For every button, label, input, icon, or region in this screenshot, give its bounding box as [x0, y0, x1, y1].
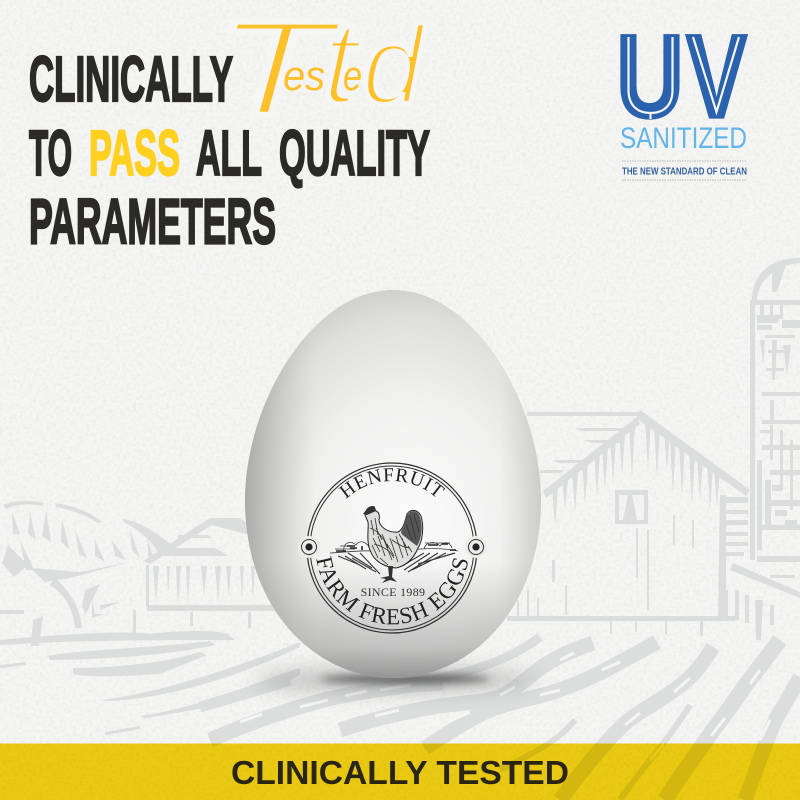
farm sketch background	[0, 258, 800, 800]
egg shadow	[255, 669, 535, 691]
bottom banner	[0, 744, 800, 800]
UV sanitized logo	[616, 11, 747, 180]
hen	[363, 506, 423, 583]
egg	[245, 290, 541, 678]
heading line 3: PARAMETERS	[29, 186, 276, 258]
big barn	[507, 410, 750, 636]
script word: Tested: d	[362, 4, 427, 127]
UV letters: V	[686, 11, 747, 143]
left ornament	[298, 536, 320, 558]
heading line 2: all: ALL	[196, 117, 262, 189]
heading line 1: CLINICALLY	[29, 43, 233, 115]
left tree	[0, 501, 172, 646]
brand name: HENFRUIT	[338, 468, 446, 499]
banner label: CLINICALLY TESTED	[231, 754, 569, 791]
farm fresh eggs: FARM FRESH EGGS	[316, 556, 468, 624]
farm landscape	[330, 542, 458, 574]
right ornament	[465, 536, 487, 558]
field furrows left	[0, 631, 300, 735]
since 1989: SINCE 1989	[361, 585, 425, 599]
henfruit stamp	[298, 462, 484, 634]
hen legs	[380, 566, 397, 583]
heading	[29, 43, 430, 258]
furrow breakups	[240, 653, 770, 770]
script word: Tested	[214, 0, 427, 144]
stamp rings	[307, 463, 477, 633]
script word: Tested: t	[322, 0, 363, 129]
UV letters	[616, 11, 747, 143]
small barn	[133, 518, 280, 636]
heading line 2: quality: QUALITY	[279, 117, 430, 189]
heading: TO	[29, 117, 72, 189]
field furrows right	[200, 637, 800, 800]
silo	[722, 258, 800, 640]
script word: Tested: e	[343, 52, 362, 99]
heading line 2: pass: PASS	[89, 117, 180, 189]
UV letters: U	[616, 11, 684, 143]
script word: Tested: es	[283, 52, 325, 99]
tagline: THE NEW STANDARD OF CLEAN	[622, 166, 747, 178]
sanitized wordmark: SANITIZED	[620, 122, 747, 155]
